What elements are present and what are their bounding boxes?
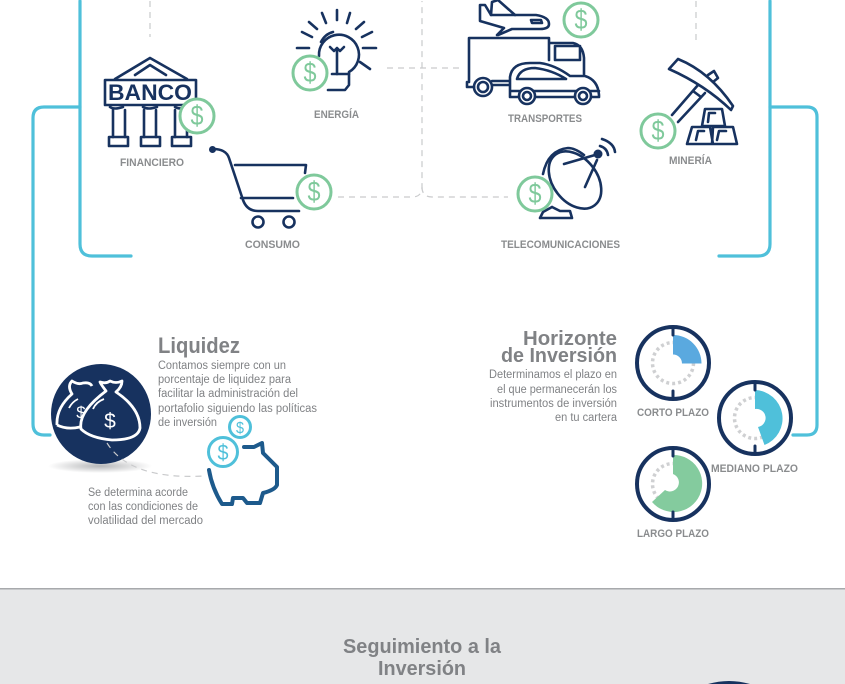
label: largo plazo: LARGO PLAZO xyxy=(637,528,709,540)
label: consumo: CONSUMO xyxy=(245,239,300,251)
icon: piggy bank with coins: $ xyxy=(218,440,228,465)
icon: shopping cart xyxy=(209,146,331,228)
icon: money bags: $ xyxy=(104,410,116,433)
text block: horizonte description: Determinamos el plazo en xyxy=(489,369,617,381)
icon: bank xyxy=(105,58,214,146)
clock: largo plazo xyxy=(637,448,709,520)
teal frame: sectors bracket xyxy=(33,1,817,435)
heading: horizonte de inversion xyxy=(501,328,617,367)
icon: piggy bank with coins xyxy=(208,416,277,504)
icon: satellite dish: $ xyxy=(528,178,542,209)
icon: bank: $ xyxy=(190,100,204,131)
heading: horizonte de inversion: Horizonte xyxy=(523,328,617,350)
panel: seguimiento a la inversion xyxy=(0,588,845,684)
icon: money bags: $ xyxy=(76,403,86,422)
text block: volatility note xyxy=(88,487,203,527)
label: energia: ENERGÍA xyxy=(314,108,359,121)
dashed connectors xyxy=(150,1,696,197)
heading: horizonte de inversion: de Inversión xyxy=(501,345,617,367)
heading: seguimiento a la inversion xyxy=(343,636,502,680)
icon: shopping cart: $ xyxy=(308,176,321,207)
text block: volatility note: volatilidad del mercado xyxy=(88,515,203,527)
icon: bank: BANCO xyxy=(108,80,192,105)
heading: seguimiento a la inversion: Inversión xyxy=(378,658,466,680)
label: transportes: TRANSPORTES xyxy=(508,113,582,125)
dashed line: money bags to piggy bank xyxy=(107,443,204,476)
label: financiero: FINANCIERO xyxy=(120,157,184,169)
icon: light bulb: $ xyxy=(304,57,317,88)
heading: liquidez: Liquidez xyxy=(158,333,240,358)
text block: liquidez description: facilitar la administración del xyxy=(158,388,298,400)
label: telecomunicaciones: TELECOMUNICACIONES xyxy=(501,239,620,251)
heading: seguimiento a la inversion: Seguimiento a la xyxy=(343,636,502,658)
clock: mediano plazo xyxy=(719,382,791,454)
text block: horizonte description: en tu cartera xyxy=(555,412,618,424)
label: mediano plazo: MEDIANO PLAZO xyxy=(711,463,798,475)
icon: plane, truck and car: $ xyxy=(574,4,588,35)
text block: horizonte description: el que permanecerán los xyxy=(497,384,617,396)
icon: pickaxe and gold: $ xyxy=(652,115,665,146)
icon: money bags xyxy=(48,364,152,473)
icon: plane, truck and car xyxy=(467,0,599,104)
text block: liquidez description: porcentaje de liquidez para xyxy=(158,374,292,386)
icon: light bulb xyxy=(293,10,376,90)
label: corto plazo: CORTO PLAZO xyxy=(637,407,709,419)
icon: piggy bank with coins: $ xyxy=(236,420,244,437)
icon: satellite dish xyxy=(518,139,615,219)
text block: volatility note: Se determina acorde xyxy=(88,487,188,499)
text block: liquidez description: portafolio siguiendo las políticas xyxy=(158,403,317,415)
text block: volatility note: con las condiciones de xyxy=(88,501,198,513)
label: mineria: MINERÍA xyxy=(669,154,712,167)
clock: corto plazo xyxy=(637,327,709,399)
icon: pickaxe and gold xyxy=(641,59,737,148)
text block: horizonte description xyxy=(489,369,618,424)
text block: horizonte description: instrumentos de inversión xyxy=(490,398,617,410)
text block: liquidez description: de inversión xyxy=(158,417,217,429)
text block: liquidez description: Contamos siempre con un xyxy=(158,360,286,372)
text block: liquidez description xyxy=(158,360,317,429)
